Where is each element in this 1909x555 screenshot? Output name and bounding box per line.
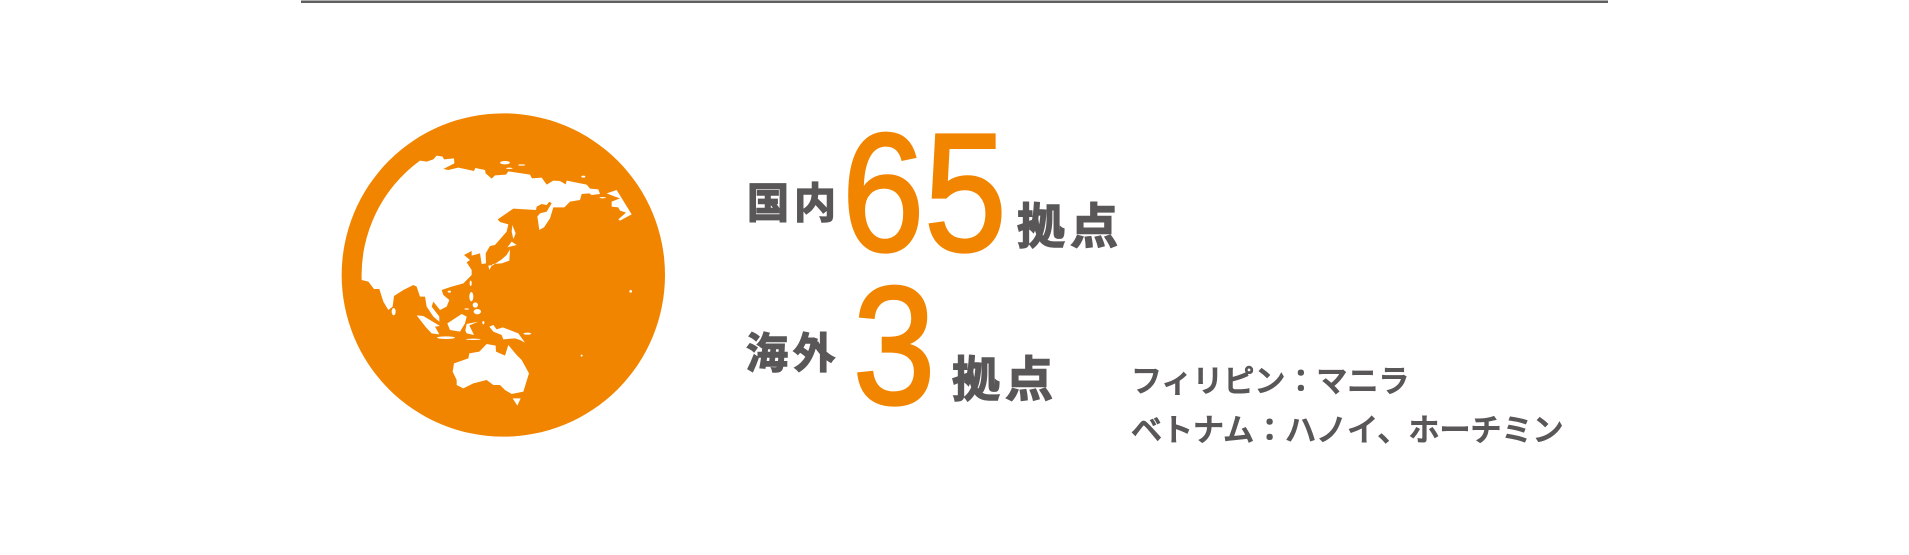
label: 拠点 overseas: 拠点 — [952, 354, 1058, 407]
line: Philippines: フィリピン：マニラ — [1131, 364, 1409, 399]
top rule — [301, 0, 1608, 3]
overseas locations list — [1131, 364, 1563, 448]
number: 65: 65 — [842, 99, 1006, 287]
label: 国内: 国内 — [747, 180, 841, 227]
line: Vietnam: ベトナム：ハノイ、ホーチミン — [1131, 413, 1563, 448]
label: 拠点 domestic: 拠点 — [1017, 201, 1123, 254]
icon: orange globe — [342, 113, 665, 437]
label: 海外: 海外 — [746, 330, 840, 377]
number: 3: 3 — [853, 252, 935, 440]
